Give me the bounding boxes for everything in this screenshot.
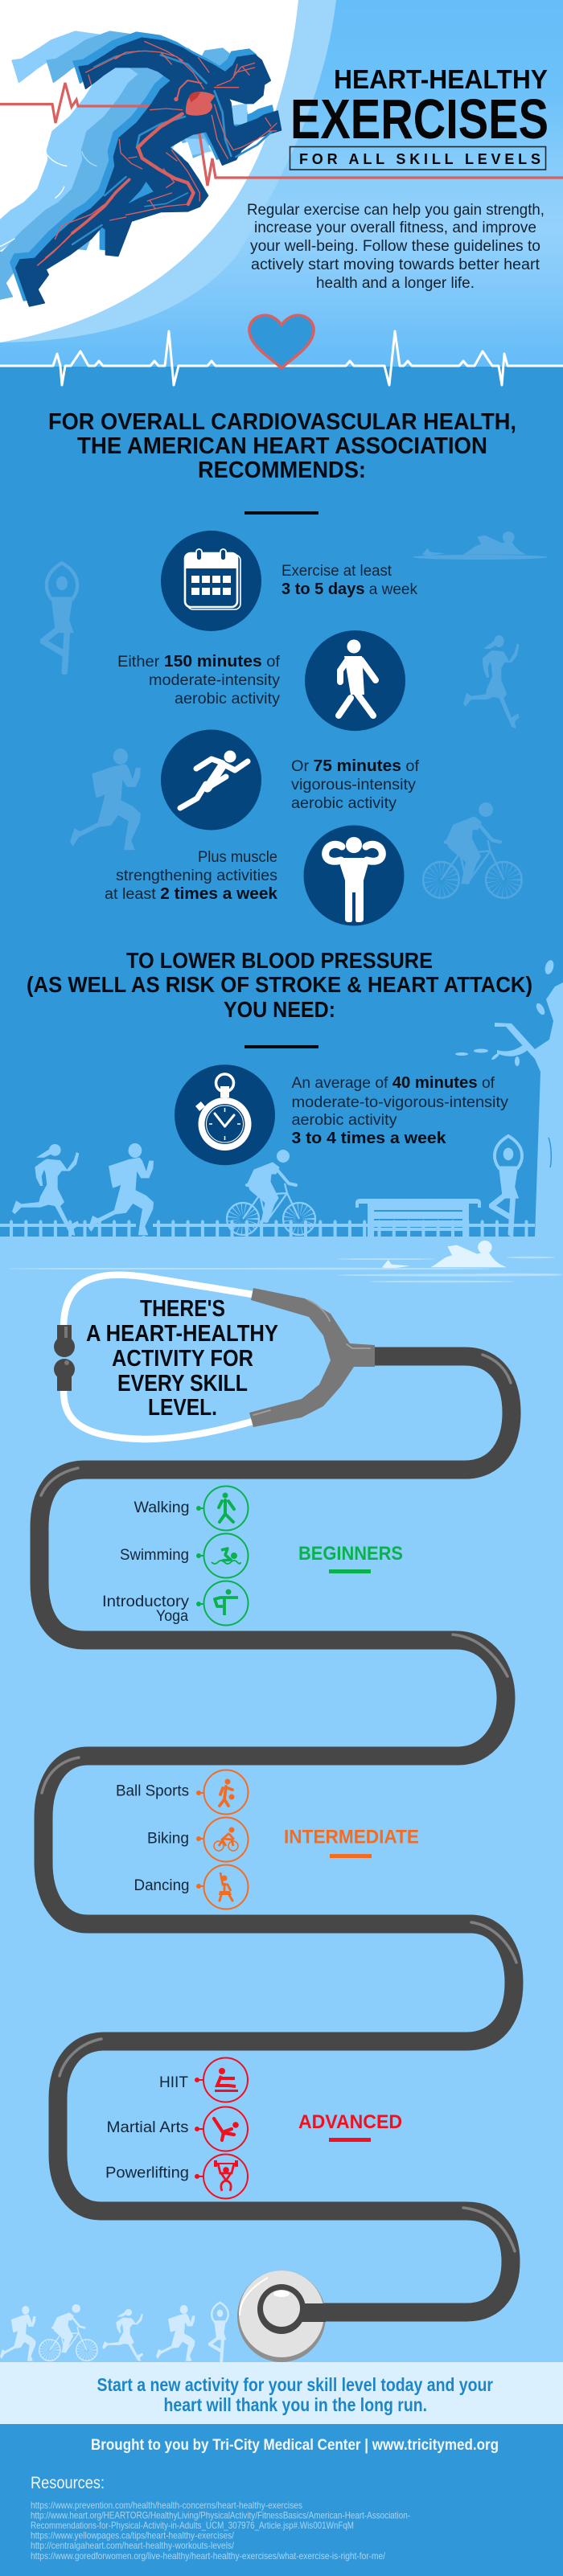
label: beginners [298, 1543, 403, 1573]
text: 150 minutes [117, 653, 281, 708]
heading: blood pressure: YOU NEED: [224, 997, 335, 1022]
heading: cardiovascular: RECOMMENDS: [198, 457, 366, 483]
intro text: Regular exercise can help you gain strength, [247, 202, 545, 219]
chestpiece [237, 2270, 326, 2362]
panel: beginners [102, 1486, 403, 1626]
activity: yoga: Yoga [156, 1608, 188, 1625]
text: days [282, 563, 417, 598]
panel: hero [0, 0, 563, 370]
item: 75 minutes [161, 730, 420, 830]
heading: skill level: A HEART-HEALTHY [86, 1321, 278, 1347]
footer [0, 2424, 563, 2576]
tube highlights [41, 1355, 516, 2251]
blue vessels [72, 51, 271, 244]
background figures: woman runner [463, 635, 520, 728]
activity: martial arts [106, 2106, 248, 2151]
icon: sprinter [161, 730, 261, 830]
text: muscle: strengthening activities [116, 868, 277, 884]
label: intermediate: INTERMEDIATE [284, 1827, 419, 1848]
text: 150 minutes: moderate-intensity [149, 672, 281, 689]
intro text [247, 202, 545, 292]
heading: skill level: THERE'S [140, 1296, 225, 1322]
text: 75 minutes: vigorous-intensity [291, 777, 417, 794]
icon: heart organ [186, 92, 215, 116]
title: FOR ALL SKILL LEVELS [299, 151, 540, 167]
text: 40 minutes: aerobic activity [291, 1112, 397, 1129]
resources list: http://www.heart.org/HEARTORG/HealthyLiving/PhysicalActivity/FitnessBasics/American-Heart-Association- [31, 2510, 410, 2521]
icon: stopwatch [175, 1064, 275, 1165]
activity: ball sports [116, 1770, 248, 1814]
activity: biking [147, 1817, 248, 1862]
activity: walking: Walking [134, 1499, 190, 1516]
item: 3 to 5 days [161, 531, 417, 631]
heading: blood pressure [27, 948, 532, 1022]
activity: yoga: Introductory [102, 1594, 190, 1610]
earpiece [54, 1325, 75, 1391]
label: advanced: ADVANCED [298, 2111, 402, 2133]
activity: ball sports: Ball Sports [116, 1783, 189, 1799]
activity: biking: Biking [147, 1830, 189, 1848]
yoga figure [491, 1136, 522, 1233]
yoke [249, 1288, 375, 1427]
item: 150 minutes [117, 630, 405, 731]
background figures: man runner [70, 749, 141, 850]
panel: advanced [105, 2058, 402, 2198]
text: muscle: at least 2 times a week [105, 885, 278, 903]
activity: dancing [134, 1865, 248, 1909]
bench [355, 1199, 481, 1237]
text: days: 3 to 5 days a week [282, 580, 417, 598]
tree [455, 959, 563, 1237]
ECG line with heart [0, 315, 563, 385]
heading: blood pressure: TO LOWER BLOOD PRESSURE [126, 948, 433, 973]
panel: recommendations background [0, 367, 563, 1237]
activity: HIIT [159, 2058, 248, 2102]
panel: intermediate [116, 1770, 419, 1909]
title: HEART-HEALTHY [334, 64, 548, 94]
activity: powerlifting [105, 2155, 248, 2198]
stethoscope [39, 1275, 516, 2362]
text: 75 minutes: aerobic activity [291, 795, 397, 812]
icon: walker [305, 630, 405, 731]
heading: cardiovascular [48, 409, 516, 483]
icon: heart outline [249, 315, 314, 368]
resources list: https://www.prevention.com/health/health-concerns/heart-healthy-exercises [31, 2500, 302, 2511]
background figures: cyclist [423, 802, 522, 898]
resources list [31, 2500, 410, 2562]
intro text: actively start moving towards better heart [251, 256, 540, 273]
label: intermediate [284, 1827, 419, 1858]
resources list: Recommendations-for-Physical-Activity-in-Adults_UCM_307976_Article.jsp#.Wis001WnFqM [31, 2520, 354, 2531]
swimmer with water [8, 1241, 563, 1282]
red vessels [38, 42, 277, 265]
intro text: increase your overall fitness, and improve [254, 219, 536, 236]
callout band [0, 2362, 563, 2424]
resources list: https://www.goredforwomen.org/live-healthy/heart-healthy-exercises/what-exercise-is-right-for-me/ [31, 2550, 386, 2562]
text: muscle: Plus muscle [198, 849, 277, 866]
heading: skill level: ACTIVITY FOR [112, 1346, 253, 1372]
callout band: heart will thank you in the long run. [164, 2394, 427, 2415]
text: muscle [105, 849, 278, 903]
text: 40 minutes [291, 1074, 509, 1147]
label: beginners: BEGINNERS [298, 1543, 403, 1565]
fence [0, 1218, 535, 1237]
cyclist [227, 1150, 315, 1235]
text: 75 minutes [291, 757, 420, 812]
activity: HIIT: HIIT [159, 2074, 188, 2091]
item: muscle strengthening [105, 825, 404, 926]
activity: martial arts: Martial Arts [106, 2119, 188, 2136]
text: 75 minutes: Or 75 minutes of [291, 757, 420, 775]
resources list: https://www.yellowpages.ca/tips/heart-healthy-exercises/ [31, 2530, 235, 2541]
runner with cardiovascular system [16, 38, 281, 306]
activity: swimming: Swimming [120, 1547, 189, 1564]
resources list: http://centralgaheart.com/heart-healthy-workouts-levels/ [31, 2540, 235, 2551]
heading: skill level: LEVEL. [148, 1395, 217, 1421]
heading: skill level [86, 1296, 278, 1421]
credit: Brought to you by Tri-City Medical Center | www.tricitymed.org [91, 2436, 499, 2454]
intro text: your well-being. Follow these guidelines to [250, 238, 540, 255]
text: 40 minutes: 3 to 4 times a week [291, 1130, 446, 1147]
icon: calendar [161, 531, 261, 631]
text: 40 minutes: moderate-to-vigorous-intensity [291, 1094, 509, 1111]
runner ghost trails [0, 31, 275, 301]
label: advanced [298, 2111, 402, 2142]
scenery: park silhouettes [0, 959, 563, 1237]
heading: cardiovascular: THE AMERICAN HEART ASSOCIATION [77, 433, 487, 459]
activity: powerlifting: Powerlifting [105, 2164, 189, 2182]
tube [39, 1356, 514, 2312]
text: 150 minutes: aerobic activity [175, 691, 281, 708]
activity: dancing: Dancing [134, 1877, 190, 1894]
activity: swimming [120, 1534, 248, 1577]
heading: cardiovascular: FOR OVERALL CARDIOVASCULAR HEALTH, [48, 409, 516, 435]
heading: skill level: EVERY SKILL [117, 1371, 248, 1397]
activity: walking [134, 1486, 248, 1531]
resources heading: Resources: [31, 2474, 105, 2492]
title [290, 64, 549, 170]
intro text: health and a longer life. [316, 275, 475, 292]
red pulse line [0, 83, 563, 186]
heading: blood pressure: (AS WELL AS RISK OF STROKE & HEART ATTACK) [27, 972, 532, 997]
woman runner [12, 1144, 79, 1236]
background figures: yoga [43, 563, 77, 672]
bottom runners [0, 2303, 228, 2361]
background figures: swimmer [413, 531, 548, 560]
white ear tubes [64, 1275, 253, 1439]
text: 40 minutes: An average of 40 minutes of [291, 1074, 495, 1092]
text: 150 minutes: Either 150 minutes of [117, 653, 281, 671]
activity: yoga [102, 1581, 248, 1626]
callout band: Start a new activity for your skill level today and your [97, 2374, 493, 2395]
man runner [88, 1143, 154, 1235]
icon: strongman [304, 825, 404, 926]
text: days: Exercise at least [282, 563, 392, 580]
